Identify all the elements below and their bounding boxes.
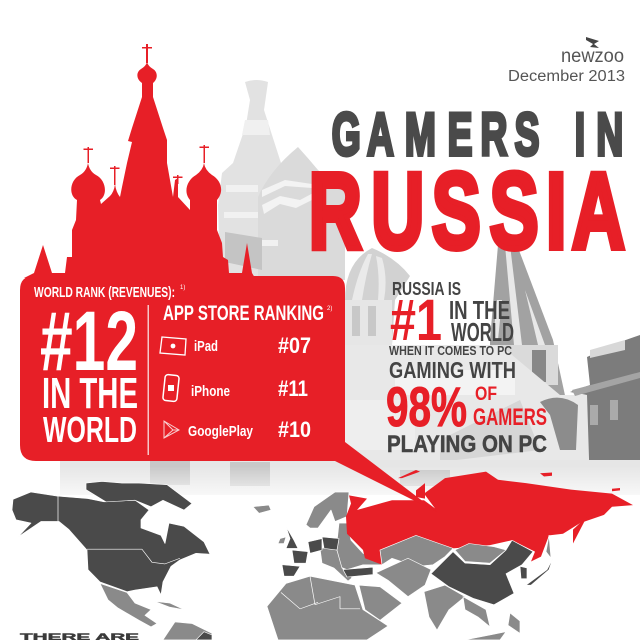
left onion tower [218, 80, 345, 280]
China, Korea, Japan [431, 540, 553, 605]
Latin America [100, 505, 271, 640]
divider [148, 305, 149, 455]
Central Asia, Mongolia, Middle East [359, 535, 551, 640]
newzoo logo: newzoo [561, 46, 624, 67]
African borders [281, 576, 360, 609]
icon: play triangle [164, 421, 179, 438]
big rank: #12 in the world: IN THE [42, 369, 138, 418]
title: GAMERS IN [332, 101, 623, 168]
red cathedral silhouette [24, 44, 255, 278]
icon: phone [163, 374, 179, 402]
row: iPad: #07 [278, 333, 311, 358]
date: December 2013 [508, 68, 625, 85]
row: iPhone [163, 374, 308, 402]
row: GooglePlay [164, 417, 311, 442]
big rank: #12 in the world: WORLD [43, 409, 137, 450]
icon: newzoo mark [586, 37, 599, 48]
row: GooglePlay: GooglePlay [188, 423, 254, 440]
heading: app store ranking: 2) [327, 306, 332, 312]
Russia [346, 470, 633, 565]
row: iPhone: iPhone [191, 383, 230, 400]
right dark building [570, 335, 640, 490]
bubble shape with pointer to Russia [20, 276, 437, 512]
Europe grey [278, 492, 382, 581]
North America [12, 481, 210, 595]
row: iPad [160, 333, 311, 358]
callout: Russia is #1 in PC gaming: IN THE [449, 295, 510, 325]
big rank: #12 in the world: #12 [40, 294, 138, 388]
title: RUSSIA [309, 150, 625, 271]
street and ground [60, 460, 640, 495]
big rank: #12 in the world [40, 294, 138, 450]
crosses [142, 44, 152, 63]
heading: world rank: WORLD RANK (REVENUES): [34, 284, 175, 301]
heading: world rank: 1) [180, 285, 185, 291]
callout: Russia is #1 in PC gaming: GAMERS [473, 404, 547, 431]
callout: Russia is #1 in PC gaming: RUSSIA IS [392, 279, 461, 299]
callout: Russia is #1 in PC gaming: #1 [390, 288, 442, 353]
callout: Russia is #1 in PC gaming: WORLD [451, 317, 514, 347]
speech bubble panel [20, 276, 437, 512]
callout: Russia is #1 in PC gaming: GAMING WITH [389, 357, 516, 383]
heading: app store ranking: APP STORE RANKING [163, 302, 324, 325]
row: GooglePlay: #10 [278, 417, 311, 442]
callout: Russia is #1 in PC gaming [386, 279, 547, 458]
Europe dark: UK, France, Germany, Poland, Spain, Turkey [282, 526, 373, 577]
callout: Russia is #1 in PC gaming: OF [475, 384, 497, 405]
callout: Russia is #1 in PC gaming: 98% [386, 375, 467, 438]
lower church body [345, 345, 590, 470]
fade to white [0, 466, 640, 506]
right spire [490, 245, 566, 400]
Africa [267, 576, 388, 640]
newzoo logo [561, 37, 624, 67]
icon: tablet [160, 337, 186, 355]
row: iPad: iPad [194, 338, 218, 355]
world map [12, 470, 633, 640]
row: iPhone: #11 [278, 376, 308, 401]
central dome [345, 248, 410, 345]
callout: Russia is #1 in PC gaming: WHEN IT COMES TO PC [389, 343, 513, 358]
background: grey cathedral illustration [0, 80, 640, 506]
Latin America north tip [196, 632, 212, 640]
callout: Russia is #1 in PC gaming: PLAYING ON PC [387, 431, 547, 458]
